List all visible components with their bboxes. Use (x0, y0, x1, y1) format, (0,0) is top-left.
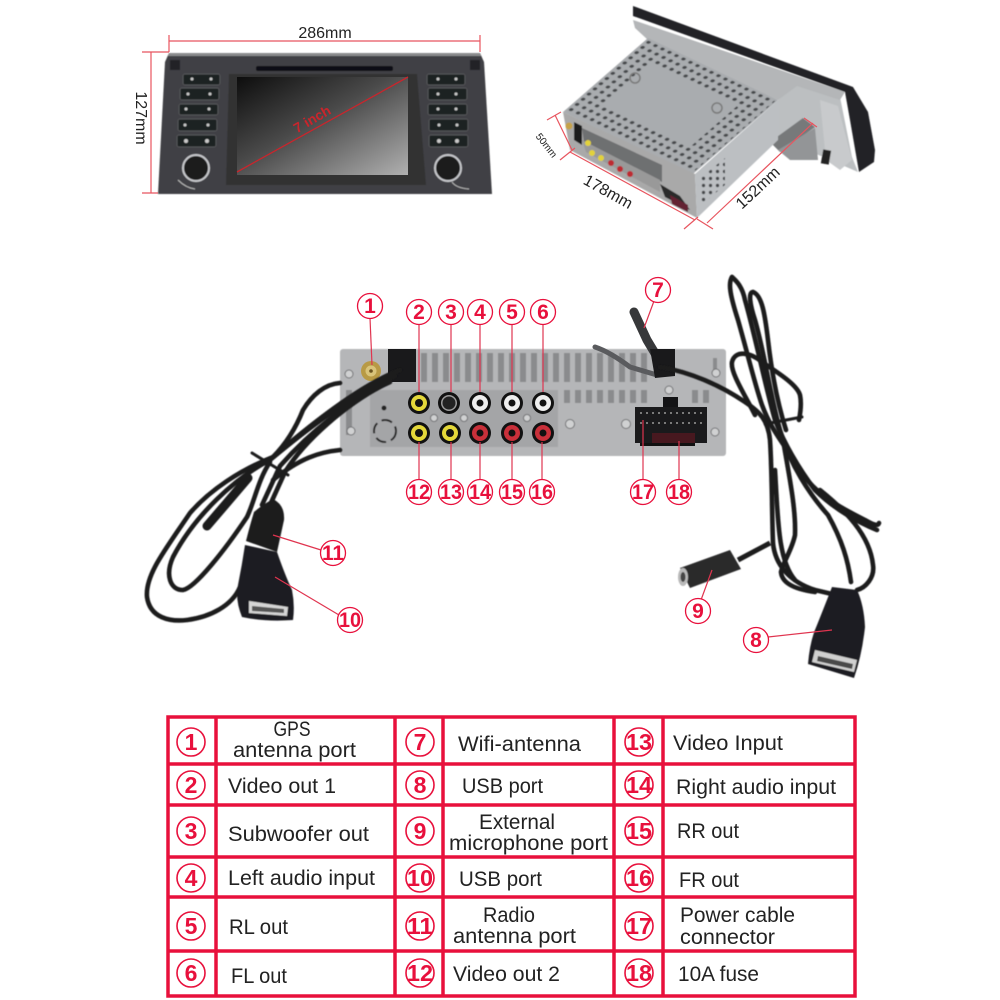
dimension: 152mm: 152mm (733, 164, 784, 213)
socket 1: GPS antenna gold (361, 361, 381, 381)
callout 7 (644, 278, 670, 328)
photo: rear panel with connectors (340, 312, 726, 456)
dimension: height 127mm (132, 52, 169, 193)
row label 17: Power cable (680, 903, 795, 927)
row label 11: antenna port (453, 924, 576, 948)
callout 5 (500, 300, 524, 392)
socket 13: yellow video input (439, 422, 461, 444)
row label 13: Video Input (673, 731, 783, 755)
row label 5: RL out (229, 915, 288, 939)
callout 8: 8 (750, 629, 762, 652)
row key 14: 14 (626, 772, 652, 798)
callout 8 (744, 628, 832, 652)
callout 5: 5 (506, 301, 518, 324)
row label 11 (453, 903, 576, 948)
callout 10 (275, 577, 362, 632)
row label 17 (680, 903, 795, 949)
cable: wifi antenna (634, 312, 662, 365)
row key 16: 16 (626, 865, 652, 891)
row label 6: FL out (231, 964, 287, 988)
cable boot left (388, 349, 416, 382)
callout 12: 12 (408, 481, 430, 504)
socket 16: red FR out (532, 422, 554, 444)
socket 6: white FL out (532, 392, 554, 414)
dimension: 50mm (533, 112, 575, 160)
dimension: height 127mm: 127mm (132, 91, 149, 145)
row key 17: 17 (626, 913, 652, 939)
row key 4 (177, 864, 205, 892)
screen diagonal: 7 inch (237, 77, 408, 172)
row key 7 (406, 728, 434, 756)
screen diagonal: 7 inch: 7 inch (290, 102, 334, 136)
dimension: width 286mm (169, 25, 480, 52)
callout 9 (686, 570, 712, 624)
row label 4: Left audio input (228, 866, 375, 890)
row key 1: 1 (185, 729, 198, 755)
row key 2 (177, 771, 205, 799)
callout 14: 14 (469, 481, 491, 504)
socket 2: yellow video out 1 (408, 392, 430, 414)
row label 11: Radio (483, 903, 535, 927)
row key 8 (406, 771, 434, 799)
row key 3 (177, 817, 205, 845)
row key 5: 5 (185, 913, 198, 939)
right cable bundle (660, 277, 879, 594)
chassis body (563, 6, 875, 218)
callout 6: 6 (537, 301, 549, 324)
microphone plug: port 9 (678, 543, 770, 588)
cable: grey lead (595, 347, 657, 375)
callout 18 (666, 441, 692, 504)
dimension: 178mm (570, 152, 698, 229)
callout 11: 11 (322, 542, 344, 565)
photo: right USB and microphone cables (660, 277, 879, 678)
callout 2: 2 (413, 301, 425, 324)
row label 3: Subwoofer out (228, 822, 369, 846)
row label 18: 10A fuse (678, 962, 759, 986)
callout 16: 16 (531, 481, 553, 504)
photo: head unit chassis view (533, 6, 875, 229)
callout 9: 9 (692, 600, 704, 623)
socket 12: yellow video out 2 (408, 422, 430, 444)
row label 14: Right audio input (676, 775, 836, 799)
row key 10: 10 (407, 865, 433, 891)
socket 4: white left audio (469, 392, 491, 414)
callout 3: 3 (445, 301, 457, 324)
callout 17: 17 (632, 481, 654, 504)
callout 3 (438, 300, 464, 392)
row label 8: USB port (462, 774, 543, 798)
callout 12 (406, 442, 432, 504)
screen (237, 77, 408, 175)
dimension: 178mm: 178mm (580, 172, 635, 213)
callout 2 (406, 300, 432, 392)
callout 16 (530, 442, 554, 504)
rear panel plate (340, 349, 726, 456)
row key 11: 11 (407, 913, 433, 939)
callout 11 (273, 535, 346, 566)
row key 2: 2 (185, 772, 197, 798)
callout 15: 15 (501, 481, 523, 504)
socket 14: red right audio (469, 422, 491, 444)
callout 18: 18 (668, 481, 690, 504)
row label 17: connector (680, 925, 775, 949)
row label 16: FR out (679, 868, 739, 892)
row key 9 (406, 817, 434, 845)
row key 6 (177, 959, 205, 987)
callout 1 (358, 294, 382, 365)
row label 9: External (479, 810, 555, 834)
callout 4 (468, 300, 492, 392)
table grid (168, 717, 855, 996)
socket 3: black subwoofer (438, 392, 460, 414)
dimension: 152mm (697, 118, 817, 229)
legend table (168, 717, 855, 996)
dimension: width 286mm: 286mm (298, 25, 352, 42)
row key 3: 3 (185, 818, 197, 844)
unit body (158, 53, 492, 194)
callout 10: 10 (339, 609, 361, 632)
row key 1 (177, 728, 205, 756)
callout 6 (530, 300, 556, 392)
row label 15: RR out (677, 819, 739, 843)
row label 9 (449, 810, 608, 855)
callout 7: 7 (652, 279, 664, 302)
row label 12: Video out 2 (453, 962, 560, 986)
power connector and fuse (635, 397, 707, 446)
row key 12: 12 (407, 960, 433, 986)
row label 10: USB port (459, 867, 542, 891)
row label 1 (233, 717, 356, 762)
dimension: 50mm: 50mm (533, 132, 559, 160)
USB connector: port 8 (808, 587, 865, 678)
row label 1: antenna port (233, 738, 356, 762)
row label 2: Video out 1 (228, 774, 336, 798)
callout 1: 1 (364, 295, 376, 318)
row label 9: microphone port (449, 831, 608, 855)
callout 4: 4 (474, 301, 486, 324)
photo: head unit front view (132, 25, 492, 194)
row key 5 (177, 912, 205, 940)
row key 9: 9 (414, 818, 426, 844)
USB connector: port 10 (237, 545, 294, 621)
callout 14 (468, 442, 492, 504)
photo: left USB and radio antenna cables (147, 370, 400, 621)
row key 13: 13 (626, 729, 652, 755)
row label 1: GPS (274, 717, 310, 741)
radio antenna plug (246, 499, 284, 552)
row key 8: 8 (414, 772, 427, 798)
row label 7: Wifi-antenna (458, 732, 581, 756)
row key 4: 4 (185, 865, 198, 891)
callout 15 (500, 442, 524, 504)
callout 13: 13 (440, 481, 462, 504)
callout 17 (630, 420, 656, 504)
cable boot right (650, 349, 675, 378)
row key 7: 7 (414, 729, 426, 755)
row key 15: 15 (626, 818, 652, 844)
left cable bundle (147, 370, 400, 620)
row key 6: 6 (185, 960, 197, 986)
callout 13 (438, 442, 464, 504)
socket 5: white RL out (501, 392, 523, 414)
row key 18: 18 (626, 960, 652, 986)
socket 15: red RR out (501, 422, 523, 444)
